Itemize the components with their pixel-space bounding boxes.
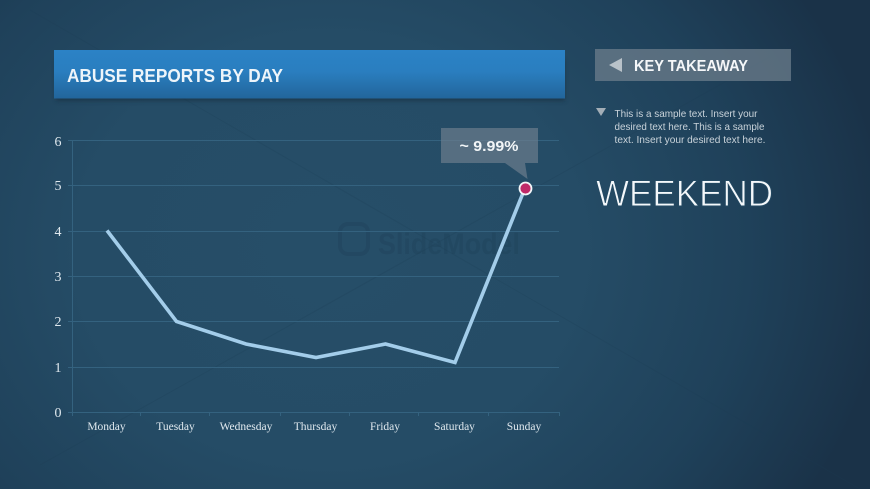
watermark: SlideModel [378, 228, 520, 261]
title text: ABUSE REPORTS BY DAY [67, 65, 284, 86]
key takeaway header [595, 49, 791, 81]
x axis labels: Wednesday [220, 421, 273, 433]
takeaway text block: text. Insert your desired text here. [614, 135, 766, 146]
y axis labels: 5 [54, 179, 62, 194]
x axis labels: Monday [87, 421, 126, 433]
x axis labels: Thursday [294, 421, 337, 433]
y axis labels: 6 [54, 135, 62, 150]
icon: left arrow [609, 58, 622, 72]
x axis labels: Friday [370, 421, 400, 433]
y axis labels: 3 [54, 270, 62, 285]
x axis labels [87, 421, 542, 433]
watermark [340, 224, 520, 261]
key takeaway header: KEY TAKEAWAY [634, 58, 748, 75]
x axis labels: Tuesday [156, 421, 195, 433]
title bar [54, 50, 565, 101]
y axis labels: 1 [54, 361, 62, 376]
y axis labels: 0 [54, 406, 62, 421]
callout: ~ 9.99% [460, 138, 518, 155]
line chart [54, 128, 560, 433]
x axis labels: Sunday [507, 421, 542, 433]
y axis labels: 2 [54, 315, 62, 330]
y axis labels [54, 135, 62, 421]
icon: down arrow [596, 108, 606, 116]
grid lines and axes [68, 140, 560, 416]
weekend heading: WEEKEND [596, 173, 773, 214]
data line [107, 188, 525, 362]
sunday marker [520, 182, 532, 194]
callout [441, 128, 538, 179]
y axis labels: 4 [54, 225, 62, 240]
takeaway text block: desired text here. This is a sample [614, 122, 765, 133]
takeaway text block [596, 108, 766, 146]
takeaway text block: This is a sample text. Insert your [614, 109, 758, 120]
x axis labels: Saturday [434, 421, 475, 433]
